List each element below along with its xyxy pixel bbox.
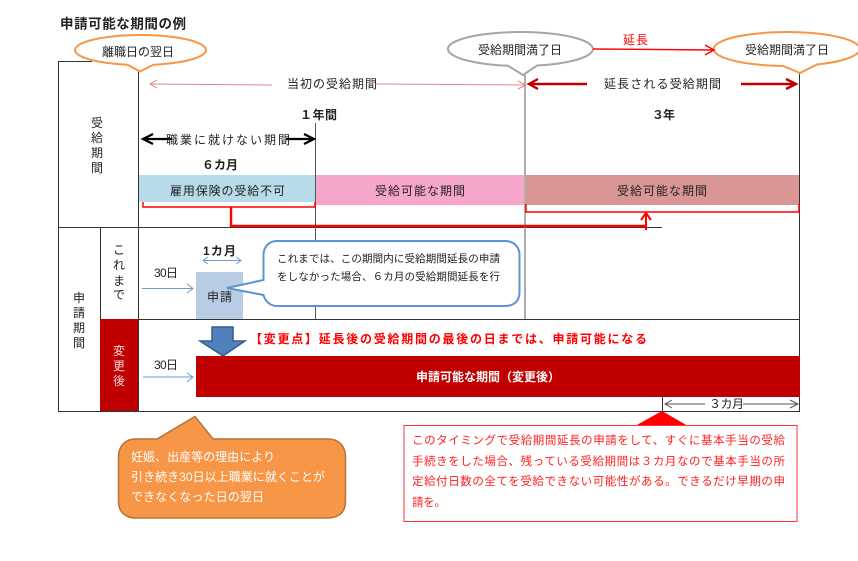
callout: pregnancy and childbirth: 妊娠、出産等の理由により [131, 450, 275, 464]
callout: timing warning: 手続きをした場合、残っている受給期間は３カ月なので基本手当の所 [412, 454, 786, 468]
callout: previous rule: これまでは、この期間内に受給期間延長の申請 [277, 252, 500, 265]
callout: previous rule [227, 241, 520, 306]
row label: until now: れ [113, 258, 125, 272]
period bar: not eligible: 雇用保険の受給不可 [170, 184, 285, 198]
row label: after change: 更 [113, 359, 125, 373]
row label: benefit period: 受 [91, 116, 103, 130]
callout: pregnancy and childbirth [118, 416, 346, 518]
arrow: 30 days after [143, 358, 193, 382]
label: six months: ６カ月 [202, 158, 238, 172]
callout: benefit period end [448, 32, 593, 75]
bracket arrow: deferred six months [143, 202, 799, 230]
arrow: initial benefit period: 当初の受給期間 [287, 77, 377, 91]
callout: day after leaving job: 離職日の翌日 [102, 45, 174, 59]
arrow: three months: ３カ月 [709, 397, 744, 411]
application period bar: 申請可能な期間（変更後） [416, 369, 560, 384]
arrow: one month [203, 244, 241, 264]
arrow: three months [665, 397, 798, 411]
arrow: extended benefit period [529, 77, 796, 91]
label: three years: ３年 [652, 107, 675, 122]
row label: application period: 請 [73, 306, 85, 320]
arrow: 30 days after: 30日 [154, 358, 178, 372]
arrow: change down [200, 327, 245, 356]
callout: pregnancy and childbirth: 引き続き30日以上職業に就くことが [131, 469, 325, 484]
application box [196, 272, 243, 319]
arrow: unable to work period: 職業に就けない期間 [166, 133, 290, 147]
period bar: eligible initial [316, 175, 524, 205]
row label: application period: 間 [73, 336, 85, 350]
row label: benefit period: 期 [91, 146, 103, 160]
change note: 【変更点】延長後の受給期間の最後の日までは、申請可能になる [250, 331, 647, 346]
callout: timing warning: このタイミングで受給期間延長の申請をして、すぐに基本手当の受給 [412, 433, 786, 447]
period bar: eligible extended [526, 175, 799, 205]
row label: benefit period [91, 116, 103, 175]
row label: application period: 申 [73, 291, 85, 305]
row label: until now: ま [113, 274, 125, 288]
period bar: eligible extended: 受給可能な期間 [617, 184, 707, 198]
arrow: one month: 1カ月 [203, 244, 236, 258]
callout: pregnancy and childbirth: できなくなった日の翌日 [131, 490, 264, 504]
row label: after change: 後 [113, 374, 125, 388]
arrow: extension: 延長 [623, 33, 648, 47]
label: one year: １年間 [300, 107, 337, 122]
callout: extended period end: 受給期間満了日 [745, 43, 829, 57]
arrow: 30 days before [142, 266, 193, 293]
row label: benefit period: 給 [91, 131, 103, 145]
callout: timing warning: 定給付日数の全てを受給できない可能性がある。できるだけ早期の申 [412, 474, 785, 488]
row label: after change: 変 [113, 343, 125, 358]
callout: benefit period end: 受給期間満了日 [478, 43, 562, 57]
row label: application period: 期 [73, 321, 85, 335]
table frame and grid [58, 61, 800, 412]
row label: after change [100, 319, 138, 411]
arrow: 30 days before: 30日 [154, 266, 178, 280]
row label: until now: で [113, 288, 125, 302]
row label: until now: こ [113, 243, 125, 257]
title: 申請可能な期間の例 [60, 16, 186, 32]
arrow: extended benefit period: 延長される受給期間 [604, 77, 721, 91]
callout: timing warning [404, 411, 797, 522]
period bar: not eligible [139, 175, 315, 202]
row label: application period [73, 291, 85, 350]
callout: previous rule: をしなかった場合、６カ月の受給期間延長を行 [277, 270, 500, 283]
callout: timing warning: 請を。 [412, 496, 446, 509]
callout: day after leaving job [75, 35, 206, 72]
row label: until now [113, 243, 125, 302]
period bar: eligible initial: 受給可能な期間 [375, 184, 465, 198]
application box: 申請 [207, 290, 232, 304]
row label: benefit period: 間 [91, 161, 103, 175]
application period bar [196, 356, 800, 397]
arrow: extension [593, 33, 714, 55]
arrow: initial benefit period [150, 77, 526, 91]
callout: extended period end [714, 32, 858, 73]
